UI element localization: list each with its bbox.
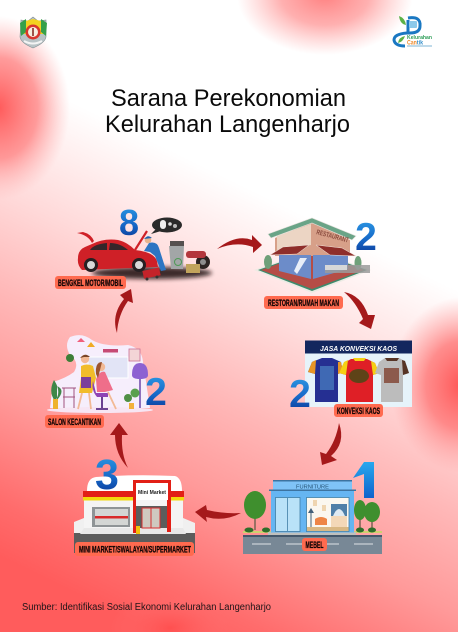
icon: car [77, 231, 158, 272]
title [105, 85, 350, 138]
icon: storefront: Mini Market [138, 490, 166, 496]
number 2: 2 [145, 371, 167, 414]
number 3: 3 [95, 451, 119, 499]
icon: restaurant building: RESTAURANT [315, 229, 350, 245]
label [55, 276, 126, 289]
panel: salon kecantikan [45, 335, 167, 428]
number 1 [353, 462, 374, 498]
icon: speech bubble [151, 218, 182, 234]
icon: mechanic [144, 236, 166, 271]
title: Sarana Perekonomian [111, 85, 346, 112]
arrow: salon to bengkel [115, 289, 133, 333]
arrow: konveksi to mebel [320, 423, 341, 465]
icon: blue shirt [308, 358, 343, 402]
title: Kelurahan Langenharjo [105, 111, 350, 138]
number 2: 2 [289, 373, 311, 416]
logo: Kelurahan Cantik [394, 16, 432, 46]
banner image: JASA KONVEKSI KAOS [320, 344, 397, 353]
icon: ground shadow [92, 267, 212, 279]
icon: furniture store: FURNITURE [296, 484, 329, 490]
label: MINI MARKET/SWALAYAN/SUPERMARKET [79, 544, 191, 556]
icon: red shirt [339, 359, 379, 402]
number 8: 8 [119, 202, 139, 243]
number 2: 2 [355, 216, 377, 259]
source note: Sumber: Identifikasi Sosial Ekonomi Kelurahan Langenharjo [22, 602, 271, 613]
panel: restoran/rumah makan [254, 216, 377, 309]
label: SALON KECANTIKAN [48, 417, 101, 428]
logo: Kabupaten crest [20, 17, 47, 48]
arrow: bengkel to restoran [217, 235, 262, 253]
panel: mebel [243, 462, 382, 554]
label: BENGKEL MOTOR/MOBIL [58, 278, 123, 289]
icon: toolbox [142, 267, 161, 280]
panel: jasa konveksi kaos [289, 340, 412, 417]
label: RESTORAN/RUMAH MAKAN [268, 298, 339, 309]
icon: salon illustration [47, 335, 153, 413]
icon: trash can and parts [169, 241, 210, 273]
panel: mini market [74, 451, 195, 556]
label: MEBEL [306, 540, 324, 551]
logo: Kelurahan Cantik: Kelurahan [407, 35, 432, 41]
icon: grey shirt [375, 358, 409, 402]
label: KONVEKSI KAOS [337, 406, 380, 417]
arrow: minimarket to salon [110, 423, 128, 468]
arrow: restoran to konveksi [344, 292, 375, 329]
arrow: mebel to minimarket [195, 505, 241, 522]
icon: trees [255, 505, 372, 530]
logo: Kelurahan Cantik: Cantik [407, 40, 424, 46]
panel: bengkel motor/mobil [55, 202, 212, 289]
